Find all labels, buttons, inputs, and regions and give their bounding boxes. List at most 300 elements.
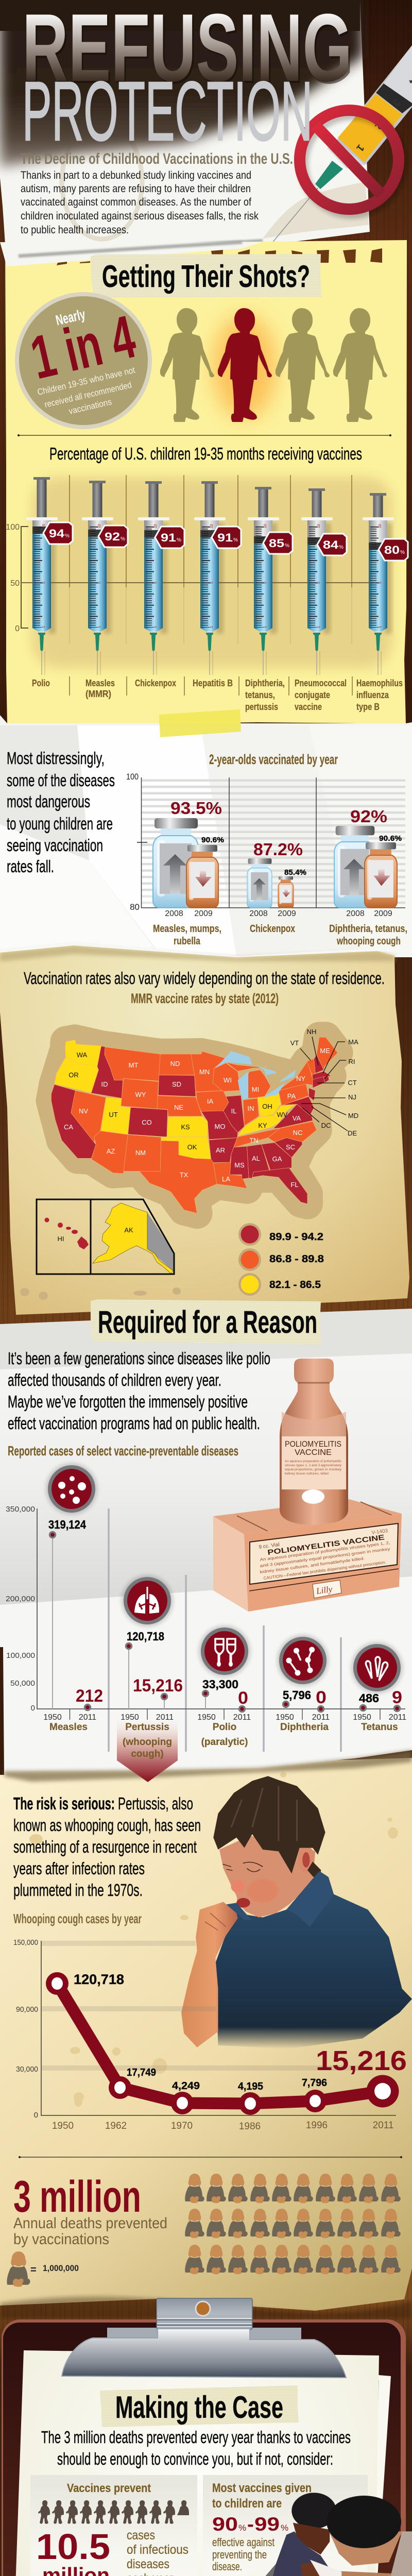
yellow tape [159,709,241,737]
state labels: NV [79,1107,88,1115]
line values [74,1972,407,2092]
stat caption [13,2215,167,2248]
beige paper [0,945,409,1315]
state labels: AL [252,1155,260,1162]
state labels: IN [247,1105,254,1112]
state labels: MI [252,1086,259,1093]
syringe: hepatitis b 91 [194,481,226,675]
year labels: 2009 [374,909,392,918]
clip [62,2298,346,2378]
state labels: NJ [348,1093,356,1101]
bottles: dtp [334,807,402,908]
map legend: 89.9 - 94.2 [269,1231,323,1243]
syringe: haemophilus 80 [363,493,394,675]
reported cases chart: 0 [31,1704,35,1713]
panel: effectiveness [203,2475,412,2576]
badge: 80 percent: 80 [384,544,400,556]
heading: Vaccines prevent [67,2481,151,2495]
callout caption [37,365,136,416]
syringe: measles 92 [82,481,113,675]
case counts: 120,718 [127,1630,164,1643]
year labels: 2011 [156,1713,174,1722]
state labels: NM [135,1149,146,1157]
bottles: measles: 93.5% [170,799,222,818]
intro paragraph: affected thousands of children every year. [8,1370,221,1389]
nurse face [330,2531,402,2566]
polio vaccine photo: equal proportions, grown in monkey [285,1468,342,1471]
badge: 94 percent [43,522,73,544]
icon: bacteria [277,1635,329,1686]
line years: 1970 [171,2121,193,2131]
bottle chart: 100 [126,772,139,782]
state labels: OR [68,1071,79,1079]
section: whooping cough background [0,1758,412,2311]
state labels: NH [307,1028,316,1036]
reported cases chart: 100,000 [6,1651,35,1660]
disease labels: (paralytic) [201,1737,248,1748]
child arm [301,2562,344,2576]
state labels: NY [296,1075,305,1082]
syringe: dtp 85: 5 [264,582,267,584]
icon: measles [46,1463,97,1515]
year labels: 2008 [346,909,365,918]
syringe labels: tetanus, [245,690,275,700]
badge: 84 percent: % [339,545,344,550]
intro paragraph [21,170,259,236]
syringe labels: type B [356,702,380,712]
case counts: 5,796 [283,1688,311,1702]
state labels: TX [180,1171,188,1179]
legend: one million: 1,000,000 [43,2263,79,2273]
line years [52,2120,393,2132]
children silhouettes: one in four [160,308,387,422]
state labels: SD [172,1080,181,1088]
year labels: 2011 [233,1713,251,1722]
state labels: MN [199,1068,210,1076]
callout caption: received all recommended [44,380,132,410]
boy collar [226,1871,334,1927]
state labels: MA [348,1038,358,1046]
syringe illustration: 1 [354,142,366,154]
line values: 7,796 [302,2077,327,2089]
intro paragraph: Maybe we’ve forgotten the immensely positive [8,1392,248,1411]
state labels: TN [249,1137,259,1144]
stat: 90 to 99: - [247,2514,254,2535]
polio vaccine photo: VACCINE [295,1448,332,1457]
polio vaccine photo: viruses types 1, 2 and 3 approximately [285,1464,342,1467]
line years: 1962 [105,2121,127,2131]
nurse shirt [381,2531,412,2576]
syringe: pneumococcal 84: 10 [317,524,321,528]
syringe: polio 94: 5 [42,582,46,584]
syringe: haemophilus 80: 1 [379,626,382,628]
case counts: 33,300 [202,1677,238,1691]
photo: box back [213,1499,402,1534]
badge: 85 percent: 85 [269,537,284,550]
year labels: 2011 [312,1713,330,1722]
syringe chart [6,475,408,675]
syringe: polio 94: 10 [42,524,46,528]
syringe: hepatitis b 91: 10 [210,524,214,528]
chart axis: 0 [15,624,20,633]
bottles: chickenpox: 85.4% [284,868,306,877]
reported cases chart [6,1505,406,1782]
disease labels: Tetanus [361,1722,398,1733]
usa map [51,1028,358,1213]
text: most distressingly: most dangerous [7,792,90,811]
state labels [64,1028,358,1189]
syringe: pneumococcal 84 [301,488,333,675]
intro paragraph: vaccinated against common diseases. As the number of [21,196,251,208]
legend: one million: = [30,2264,37,2276]
badge: 94 percent: % [65,533,70,539]
syringe: haemophilus 80: 10 [379,524,382,528]
pictogram: children [38,2500,189,2524]
stems and dots [53,1535,286,1709]
year labels: 2011 [79,1713,96,1722]
syringe labels: Chickenpox [135,678,176,688]
syringe labels: (MMR) [85,689,111,699]
bottles: dtp: 92% [350,807,387,826]
state labels: CA [64,1123,73,1131]
map legend: 82.1 - 86.5 [269,1279,321,1291]
prohibition sign [300,110,402,213]
case counts: 212 [76,1686,103,1706]
text: most distressingly: rates fall. [7,857,54,876]
badge: 92 percent: 92 [105,530,120,543]
bottles: chickenpox: 87.2% [253,840,303,859]
line values: 120,718 [74,1972,124,1987]
state labels: SC [286,1143,295,1151]
bottles: dtp: 90.6% [379,834,402,843]
syringe labels: Pneumococcal [295,678,347,688]
disease labels: Chickenpox [250,923,295,935]
syringe labels [32,676,403,712]
badge: 92 percent: % [121,536,125,542]
year labels: 1950 [276,1713,294,1722]
year labels: 2008 [249,909,268,918]
line chart: 0 [34,2111,38,2120]
badge: 85 percent [263,532,293,554]
syringe illustration [261,45,412,256]
reported cases chart: 200,000 [6,1595,35,1603]
heading: Most vaccines given [212,2481,312,2495]
line values: 17,749 [127,2067,156,2078]
polio vaccine photo [213,1359,402,1612]
heading: to children are [212,2497,282,2511]
photo: bottle [280,1359,348,1525]
syringe: chickenpox 91 [138,481,169,675]
year labels: 2008 [165,909,183,918]
header panel [0,0,412,266]
state labels: PA [287,1092,296,1100]
chart axis: 100 [6,523,20,532]
paragraph: the risk is serious [13,1794,201,1900]
state labels: RI [348,1058,355,1065]
polio vaccine photo: kidney tissue cultures, killed [285,1472,329,1476]
syringe labels: Polio [32,678,50,688]
stat: 3 million: 3 million [13,2172,141,2222]
illustration: child receiving injection [252,2493,412,2576]
child head [291,2493,336,2529]
disease labels: Measles [49,1722,88,1733]
case counts: 486 [359,1691,379,1705]
syringe illustration: 2 [372,120,385,131]
badge: 84 percent [317,534,347,555]
inset: alaska and hawaii: HI [58,1235,64,1243]
state labels: WY [135,1091,146,1098]
syringe: measles 92: 10 [98,524,101,528]
polio vaccine photo: POLIOMYELITIS VACCINE [267,1533,385,1556]
coffee stain [62,124,142,239]
icon: crutches [199,1625,250,1677]
syringe: pneumococcal 84: 1 [317,626,321,628]
map legend: 86.8 - 89.8 [269,1253,324,1265]
state labels: IL [231,1107,236,1115]
paragraph: the risk is serious: something of a resurgence in recent [13,1837,197,1856]
nurse arm [334,2571,391,2576]
intro paragraph: to public health increases. [21,224,129,236]
text: most distressingly: Most distressingly, [7,749,105,768]
state labels: CT [348,1079,357,1087]
disease labels: Measles, mumps, [153,923,221,935]
syringe: chickenpox 91: 5 [154,582,158,584]
disease labels: cough) [131,1749,164,1759]
syringe: chickenpox 91: 10 [154,524,158,528]
leader lines [300,1037,348,1131]
polio vaccine photo: V-1403 [371,1528,388,1536]
line chart: 150,000 [13,1938,38,1947]
caption [212,2536,274,2573]
heading: Getting Their Shots? [102,259,310,294]
clipboard [0,2296,412,2576]
legend: one million [7,2251,79,2287]
stat caption: by vaccinations [13,2231,109,2248]
syringe labels: Measles [85,678,115,688]
intro paragraph: effect vaccination programs had on public health. [8,1414,260,1433]
panel: vaccines prevent [30,2475,197,2576]
disease labels [153,923,407,947]
year labels [43,1713,406,1722]
pertussis arrow [117,1721,178,1782]
polio vaccine photo: An aqueous preparation of poliomyelitis viruses types 1, 2, [260,1540,390,1562]
polio vaccine photo: 9 cc. Vial [259,1542,280,1550]
text: most distressingly: some of the diseases [7,771,115,790]
badge: hepatitis 91 percent: % [233,537,238,543]
nurse hair [327,2496,401,2548]
line chart [13,1938,407,2132]
case counts: 319,124 [48,1518,86,1531]
syringe: hepatitis b 91: 5 [210,582,214,584]
line markers [46,1972,399,2115]
jacket [252,2531,347,2576]
map legend [238,1223,324,1296]
text: most distressingly [7,749,115,876]
state labels: IA [207,1097,213,1105]
badge: hepatitis 91 percent: 91 [217,531,233,544]
intro paragraph [8,1349,270,1433]
syringe: polio 94: 1 [42,626,46,628]
intro paragraph: It’s been a few generations since diseases like polio [8,1349,270,1368]
state labels: KY [258,1122,267,1129]
syringe: chickenpox 91: 1 [154,626,158,628]
intro [41,2428,351,2468]
photo: box front [213,1516,248,1612]
panel: state map [0,942,412,1315]
paper under [21,2375,391,2576]
glove [310,2560,341,2576]
bottles: measles: 90.6% [201,836,224,844]
boy ear [298,1845,314,1873]
state labels: FL [290,1181,299,1189]
state labels: LA [222,1175,230,1183]
state labels: VA [293,1114,301,1122]
state labels: DE [348,1129,357,1137]
badge: 92 percent [98,526,128,547]
polio vaccine photo: An aqueous preparation of poliomyelitis [285,1460,342,1463]
caption: of infectious [127,2543,188,2557]
yellow paper [5,240,407,725]
callout number: 1 in 4 [25,302,142,392]
heading tape [100,2385,299,2427]
badge: 94 percent: 94 [49,527,65,540]
paragraph: the risk is serious: plummeted in the 1970s. [13,1880,143,1900]
year labels: 2009 [278,909,296,918]
line chart: 90,000 [16,2005,38,2014]
heading: Making the Case [115,2390,283,2425]
syringe labels: vaccine [295,702,322,712]
paper top [8,2350,379,2576]
badge: 91 percent [155,527,184,548]
bottles: measles [153,799,224,908]
callout: 1 in 4 [15,292,152,429]
caption: preventing the [212,2548,267,2561]
panel: distressing trend [0,709,412,957]
reported cases chart: 50,000 [10,1679,35,1688]
syringe: measles 92: 1 [98,626,101,628]
state labels: OH [262,1103,272,1110]
polio vaccine photo: and 3 (approximately equal proportions) grown in monkey [260,1547,390,1568]
disease labels: (whooping [123,1737,172,1748]
year labels [165,909,392,918]
line years: 1996 [306,2120,328,2131]
year labels: 1950 [353,1713,371,1722]
disease labels: Diphtheria [280,1722,329,1733]
disease labels: Pertussis [125,1722,169,1733]
boy face [219,1836,315,1918]
illustration: coughing boy [181,1776,412,2049]
intro paragraph: children inoculated against serious diseases falls, the risk [21,210,259,222]
gray wall background [0,1309,412,1771]
icon: lungs [122,1575,173,1626]
state labels: UT [109,1111,118,1118]
polio vaccine photo: POLIOMYELITIS [285,1440,341,1449]
chart heading: Whooping cough cases by year [13,1911,142,1926]
reported cases chart: 350,000 [6,1505,35,1514]
bottle chart [126,772,407,947]
big number: 10.5 [36,2527,110,2567]
badge: hepatitis 91 percent [212,527,241,548]
polio vaccine photo: Lilly [315,1584,333,1596]
heading [212,2481,312,2511]
state labels: MT [129,1061,138,1069]
caption [127,2528,188,2576]
line values: 4,195 [238,2081,263,2092]
panel: required for a reason [0,1299,412,1782]
dark shadow over paper [0,0,363,167]
icon: tetanus spores [351,1642,403,1693]
year labels: 1950 [197,1713,216,1722]
state labels: WV [277,1111,288,1118]
caption: disease. [212,2560,242,2573]
state labels: DC [321,1122,331,1129]
syringe labels: Diphtheria, [245,678,285,688]
syringe: dtp 85 [248,487,279,675]
boy shirt [215,1871,412,2049]
polio vaccine photo: CAUTION—Federal law prohibits dispensing without prescription. [263,1560,386,1581]
state labels: MS [234,1161,245,1169]
state labels: AR [216,1146,225,1154]
state labels: WA [77,1051,88,1059]
case counts [48,1518,402,1708]
state labels: WI [224,1076,232,1084]
syringe: pneumococcal 84: 5 [317,582,321,584]
badge: 91 percent: % [177,537,181,543]
stat: 90 to 99: % [238,2523,246,2533]
text: most distressingly: to young children are [7,814,113,833]
callout caption: vaccinations [68,397,113,416]
state labels: MD [348,1112,358,1120]
state labels: ME [320,1047,330,1055]
syringe labels: influenza [356,690,389,700]
white sheet edge over yellow [0,242,263,266]
caption: cases [127,2528,155,2543]
disease labels: Polio [213,1722,236,1733]
case counts: 15,216 [133,1676,183,1696]
heading tape [91,254,321,298]
paper sheet [0,0,370,266]
state labels: CO [142,1118,152,1126]
syringe: dtp 85: 1 [264,626,267,628]
chart axis: 50 [10,579,20,588]
paragraph: the risk is serious: Pertussis, also [118,1794,193,1813]
chart axis [6,523,371,633]
year labels: 1950 [121,1713,139,1722]
clipboard board [2,2319,406,2576]
text: most distressingly: seeing vaccination [7,836,103,855]
state labels: GA [272,1155,282,1163]
badge: 80 percent: % [400,550,405,555]
chart heading: Reported cases of select vaccine-preventable diseases [8,1443,238,1459]
callout text nearly: Nearly [54,306,87,328]
year labels: 2011 [389,1713,406,1722]
polio vaccine photo: kidney tissue cultures, and formaldehyde killed. [260,1556,365,1574]
stat caption: Annual deaths prevented [13,2215,167,2232]
badge: 91 percent: 91 [161,531,176,544]
disease labels [49,1722,398,1759]
bottles: chickenpox [247,840,306,908]
badge: 84 percent: 84 [323,538,339,551]
line chart: 30,000 [16,2065,38,2074]
inset: alaska and hawaii [37,1199,174,1274]
syringe labels: pertussis [245,702,278,712]
stat: 90 to 99 [212,2514,288,2535]
line values: 15,216 [316,2045,407,2076]
badge: 80 percent [379,539,408,561]
syringe: measles 92: 5 [98,582,101,584]
subtitle: The Decline of Childhood Vaccinations in the U.S. [21,150,293,167]
syringe: haemophilus 80: 5 [379,582,382,584]
